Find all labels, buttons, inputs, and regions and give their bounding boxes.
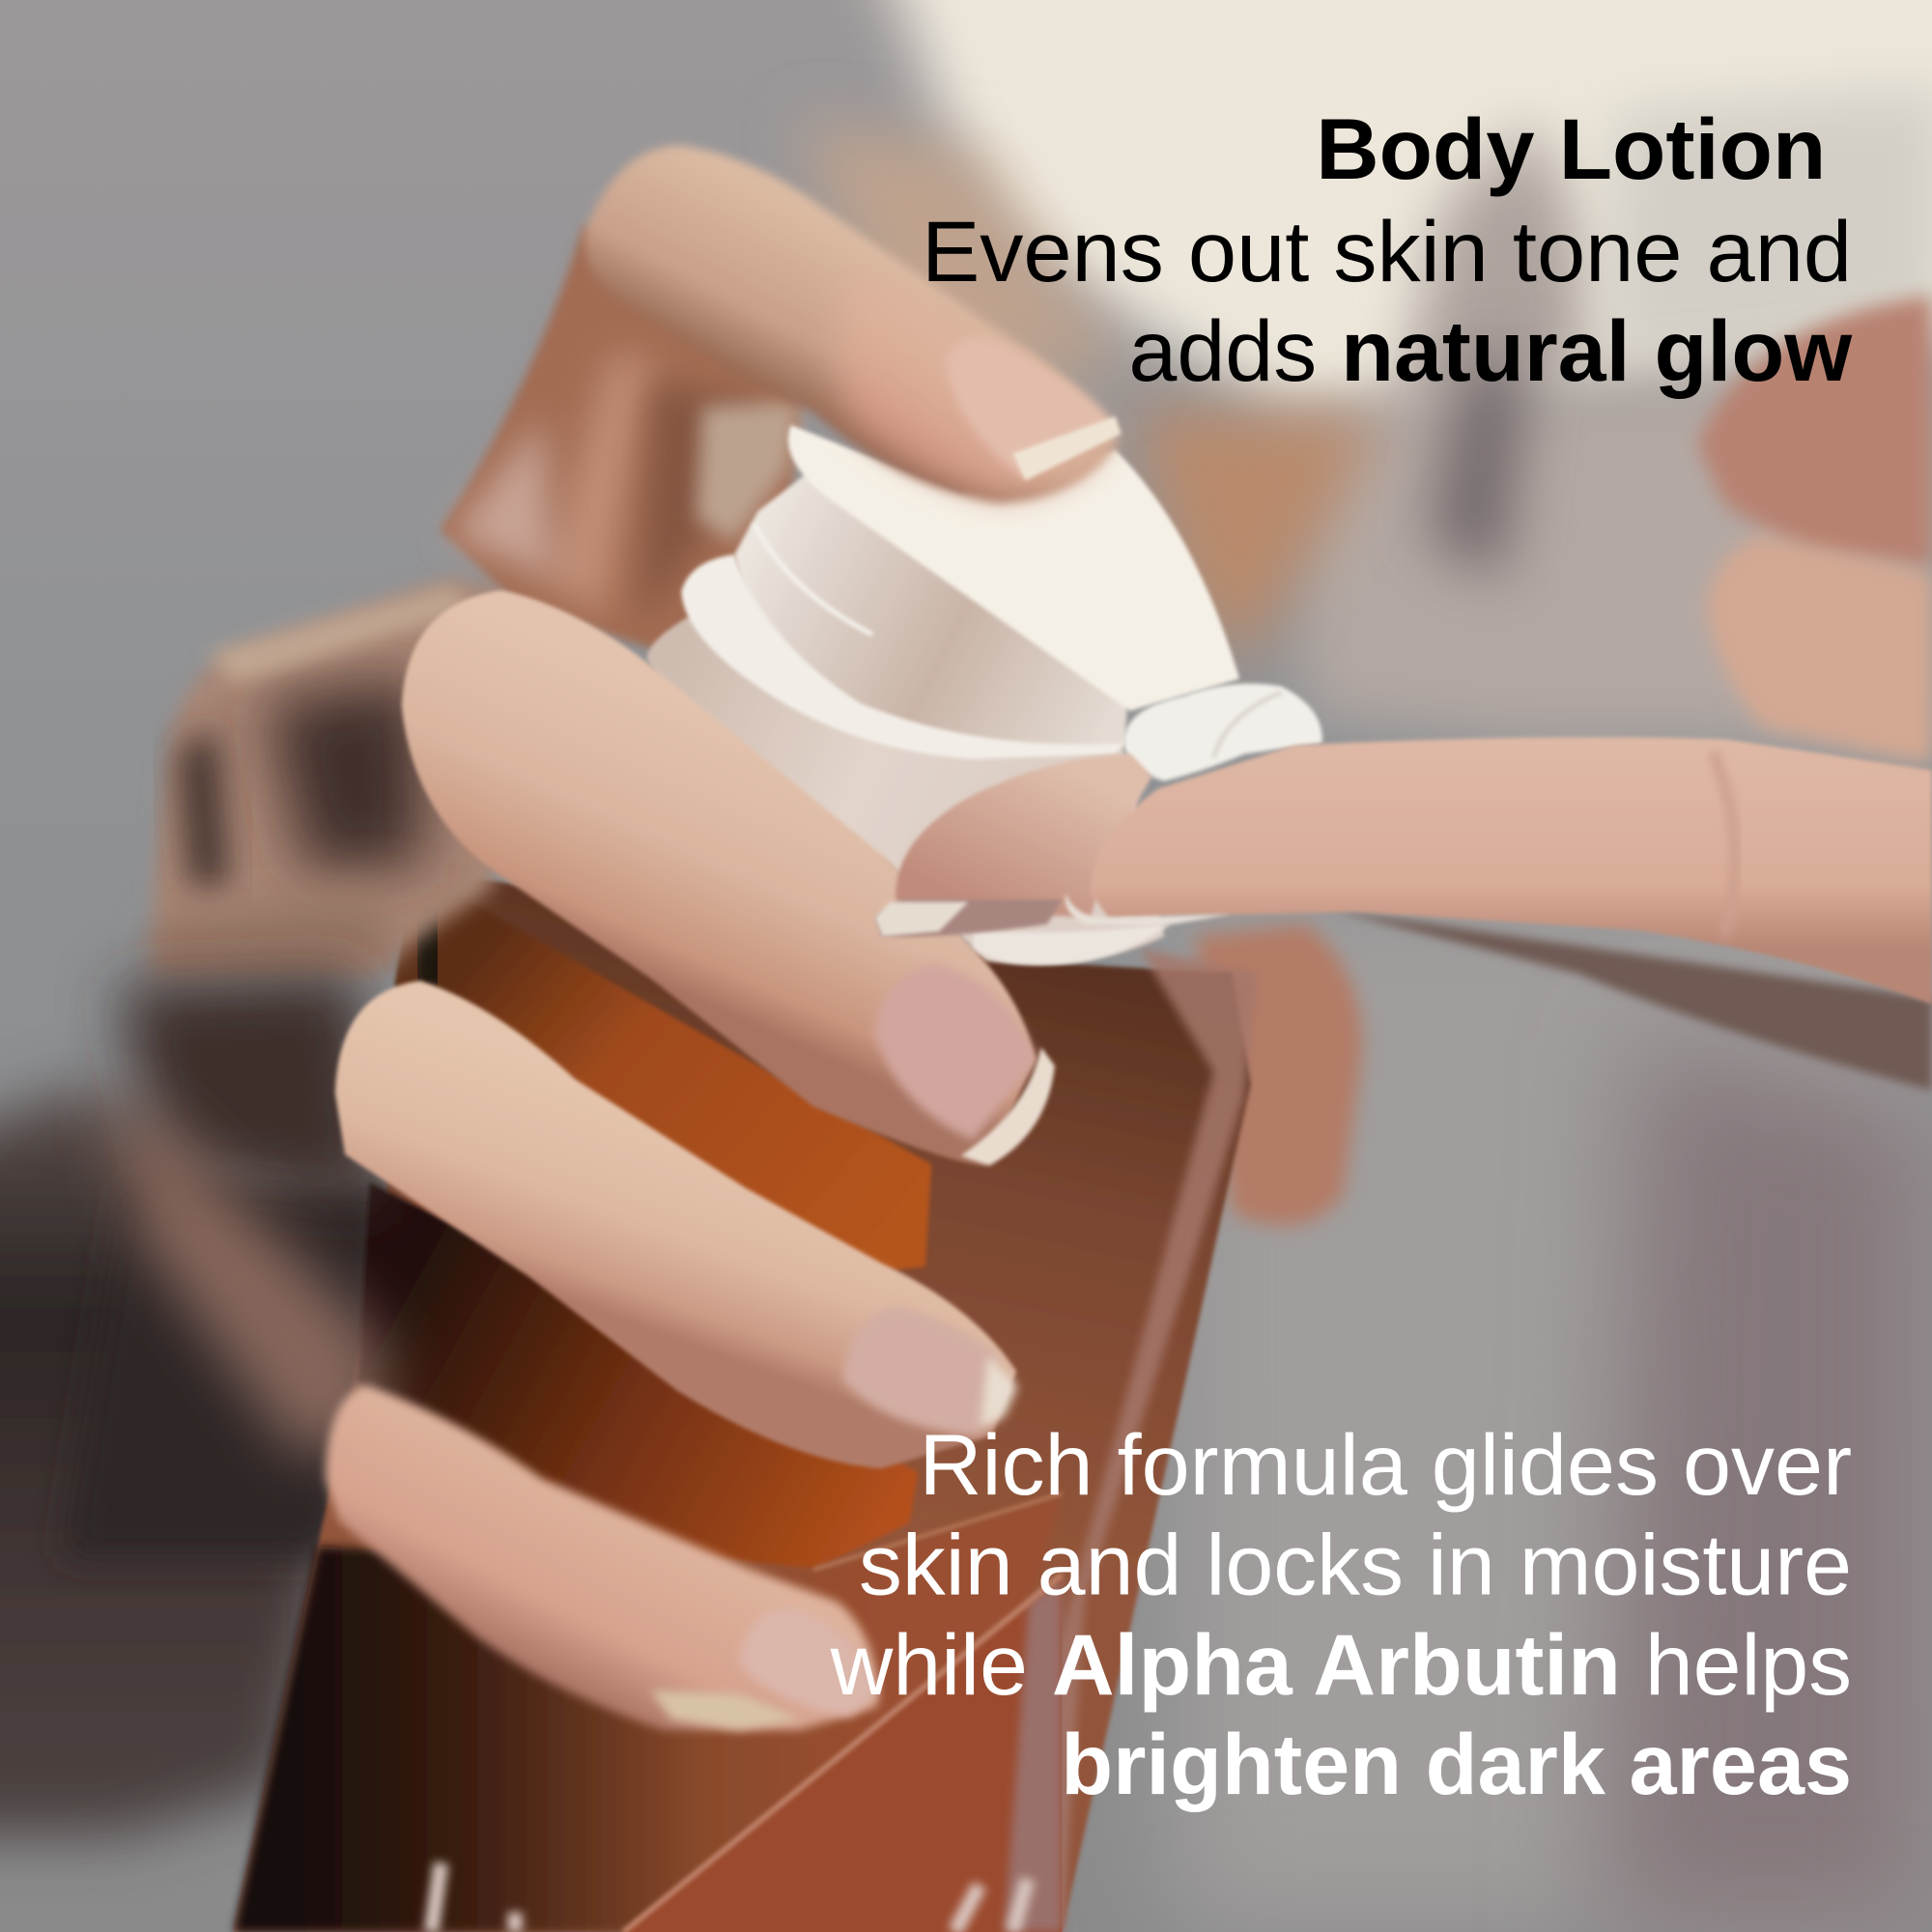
right bottle band — [1029, 949, 1257, 1932]
right small finger — [875, 754, 1152, 937]
lotion — [1123, 684, 1322, 781]
title: Body Lotion — [1316, 100, 1826, 197]
body line 4: brighten dark areas — [1061, 1716, 1852, 1812]
thumb nail — [947, 339, 1115, 478]
thumb — [584, 146, 1122, 502]
pump — [647, 425, 1239, 965]
heading text: top right — [922, 100, 1853, 399]
body text: bottom right — [830, 1416, 1852, 1812]
left hand back — [111, 579, 518, 1454]
bottle lettering fragments — [431, 1863, 1028, 1932]
finger 3 — [326, 1385, 877, 1730]
subtitle line 1: Evens out skin tone and — [922, 203, 1852, 299]
fingernail — [875, 899, 1062, 937]
subtitle line 2: adds natural glow — [1128, 302, 1853, 399]
right index finger — [1065, 737, 1932, 1091]
pump nozzle — [788, 425, 1239, 711]
body line 3: while Alpha Arbutin helps — [830, 1616, 1852, 1713]
sleeve, dark, blurred — [0, 1084, 394, 1836]
finger 1 — [402, 590, 1055, 1166]
bottle — [234, 868, 1257, 1932]
right hand upper fingers — [1698, 296, 1932, 764]
finger 1 nail — [875, 963, 1037, 1140]
body line 1: Rich formula glides over — [920, 1416, 1852, 1513]
finger 2 — [335, 980, 1018, 1468]
body line 2: skin and locks in moisture — [859, 1517, 1852, 1613]
behind finger — [1195, 924, 1362, 1226]
palm between thumb and finger — [440, 224, 801, 659]
finger 2 nail — [842, 1306, 998, 1435]
